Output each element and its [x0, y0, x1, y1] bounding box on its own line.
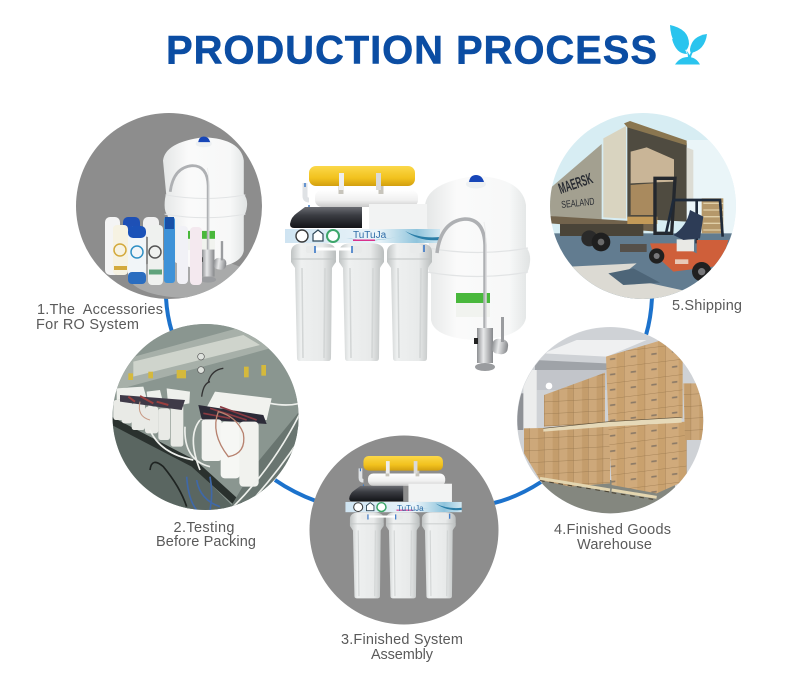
label 3 — [341, 632, 463, 663]
brand text: TuTuJa — [353, 230, 387, 241]
label 1 — [36, 302, 163, 333]
gray circle background — [76, 113, 262, 299]
centre product: RO system — [285, 166, 530, 371]
gray circle background — [310, 436, 498, 624]
label 4: 4.Finished Goods — [554, 522, 671, 538]
receding test stations — [113, 400, 183, 447]
water tank — [163, 136, 247, 268]
photo background — [517, 327, 703, 513]
assembled unit — [345, 456, 462, 598]
label 1: For RO System — [36, 317, 139, 333]
panel: step 4 warehouse — [513, 323, 710, 517]
label 2: 2.Testing — [174, 520, 234, 536]
icon: sprout — [670, 25, 707, 64]
panel: step 3 assembly — [310, 436, 498, 624]
label 2: Before Packing — [156, 534, 256, 550]
blue connector arcs — [166, 298, 652, 503]
photo scene — [550, 121, 740, 307]
label 4 — [554, 522, 671, 553]
photo scene: SEALAND — [561, 197, 595, 211]
label 1: 1.The Accessories — [37, 302, 163, 318]
label 3: Assembly — [371, 647, 434, 663]
label 3: 3.Finished System — [341, 632, 463, 648]
label 2 — [156, 520, 256, 550]
photo scene — [517, 334, 704, 514]
photo scene — [110, 320, 303, 513]
panel: step 5 shipping — [550, 113, 740, 307]
photo scene: MAERSK — [556, 170, 595, 198]
sky — [550, 113, 736, 299]
title: PRODUCTION PROCESS — [166, 28, 657, 72]
brand text: TuTuJa — [397, 504, 424, 513]
filter cartridges — [105, 217, 202, 285]
tank — [425, 175, 530, 340]
faucet — [170, 166, 227, 283]
photo background — [112, 324, 298, 510]
label 5: 5.Shipping — [672, 298, 742, 314]
floor reflection — [133, 260, 239, 298]
panel: step 1 accessories — [76, 113, 262, 299]
filter stages — [285, 166, 440, 361]
label 4: Warehouse — [577, 537, 652, 553]
panel: step 2 testing — [110, 320, 303, 513]
faucet — [437, 219, 509, 371]
